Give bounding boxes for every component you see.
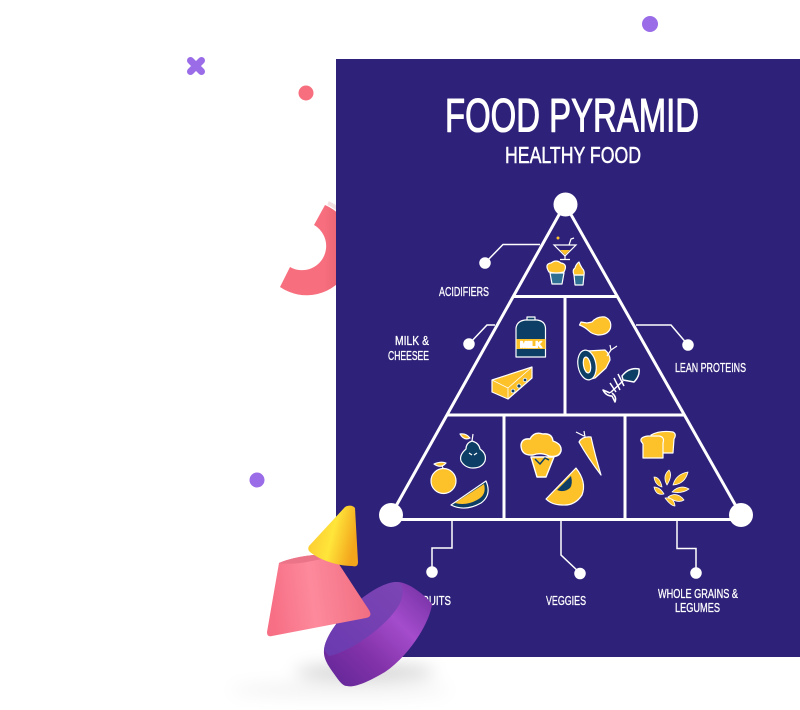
label: milk and cheese: CHEESEE [388, 349, 429, 363]
connector: fruits [427, 520, 452, 577]
purple disc [324, 582, 432, 686]
3d shapes group [230, 506, 450, 697]
label: fruits: FRUITS [416, 594, 451, 608]
label: whole grains and legumes: WHOLE GRAINS & [658, 587, 738, 601]
icon: martini [554, 236, 576, 260]
connector: lean proteins [636, 325, 693, 350]
decoration: purple dot top [642, 16, 658, 32]
icon: broccoli [521, 433, 561, 477]
pink cone [267, 554, 370, 636]
decoration: ring soft shadow [328, 203, 357, 288]
yellow cone [308, 506, 358, 566]
label: milk and cheese: MILK & [395, 334, 430, 348]
label: milk and cheese [388, 334, 430, 363]
icon: milk carton [516, 317, 546, 357]
label: whole grains and legumes [658, 587, 738, 615]
icon: orange [431, 462, 456, 494]
icon: squash [546, 468, 584, 505]
panel: poster background [336, 59, 800, 657]
pyramid node: apex [554, 192, 578, 216]
pyramid node: left corner [379, 503, 403, 527]
icon: muffin [547, 261, 565, 284]
label: acidifiers: ACIDIFIERS [439, 285, 489, 299]
decoration: coral dot [298, 86, 314, 100]
subtitle: HEALTHY FOOD [505, 142, 641, 168]
connector: veggies [561, 520, 585, 578]
icon: cheese [492, 367, 532, 399]
decoration: coral ring segment [280, 205, 354, 295]
icon: fish bones [603, 369, 639, 402]
label: whole grains and legumes: LEGUMES [675, 601, 720, 615]
title: FOOD PYRAMID [445, 88, 699, 142]
icon: ham [576, 345, 617, 381]
decoration: purple cross [190, 60, 202, 72]
icon: milk carton: MILK [520, 340, 543, 350]
icon: wheat [654, 470, 689, 506]
shadow under shapes [230, 664, 450, 697]
decoration: purple dot left [250, 472, 264, 488]
icon: ice cream [573, 262, 584, 285]
icon: chicken leg [580, 317, 611, 335]
icon: pear [460, 434, 485, 468]
label: lean proteins: LEAN PROTEINS [675, 361, 746, 375]
pyramid outline and dividers [391, 204, 741, 520]
label: veggies: VEGGIES [546, 594, 586, 608]
connector: milk and cheese [464, 325, 495, 349]
connector: whole grains [677, 520, 701, 578]
pyramid node: right corner [729, 503, 753, 527]
icon: watermelon [451, 481, 488, 508]
icon: carrot [576, 431, 601, 475]
connector: acidifiers [480, 244, 540, 268]
icon: bread [641, 431, 675, 458]
